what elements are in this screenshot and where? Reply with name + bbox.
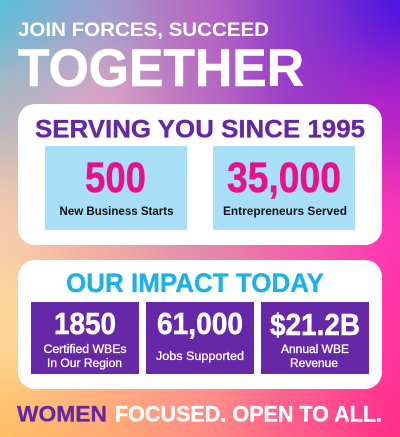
stat card: entrepreneurs served: 35,000 (227, 154, 341, 202)
tagline: focused, open to all: FOCUSED. OPEN TO ALL. (115, 402, 382, 426)
panel: serving you since 1995 (18, 104, 382, 245)
stat card: annual WBE revenue: Revenue (290, 358, 338, 370)
stat card: new business starts: New Business Starts (60, 206, 174, 218)
stat card: annual WBE revenue: Annual WBE (281, 344, 349, 356)
stat card: jobs supported (146, 302, 254, 374)
stat card: entrepreneurs served (213, 146, 355, 230)
panel background (18, 104, 382, 245)
stat card: new business starts (45, 146, 187, 230)
stat card: certified WBEs (31, 302, 139, 374)
stat card: entrepreneurs served: Entrepreneurs Served (223, 206, 347, 218)
stat card: annual WBE revenue (261, 302, 369, 374)
stat card: new business starts: 500 (85, 154, 146, 202)
heading: OUR IMPACT TODAY (66, 268, 324, 298)
stat card: jobs supported: 61,000 (157, 306, 243, 341)
title (18, 19, 304, 98)
stat card: jobs supported: Jobs Supported (156, 351, 244, 363)
stat card: annual WBE revenue: $21.2B (270, 307, 360, 342)
panel background (18, 260, 382, 389)
footer tagline (17, 402, 382, 426)
panel: our impact today (18, 260, 382, 389)
title line: together: TOGETHER (18, 39, 304, 98)
stat card: certified WBEs: In Our Region (47, 358, 122, 370)
stat card: certified WBEs: 1850 (54, 306, 116, 341)
title line: join forces: JOIN FORCES, SUCCEED (18, 19, 269, 41)
stat card: certified WBEs: Certified WBEs (44, 344, 127, 356)
tagline: women: WOMEN (17, 402, 107, 426)
heading: SERVING YOU SINCE 1995 (35, 116, 365, 144)
